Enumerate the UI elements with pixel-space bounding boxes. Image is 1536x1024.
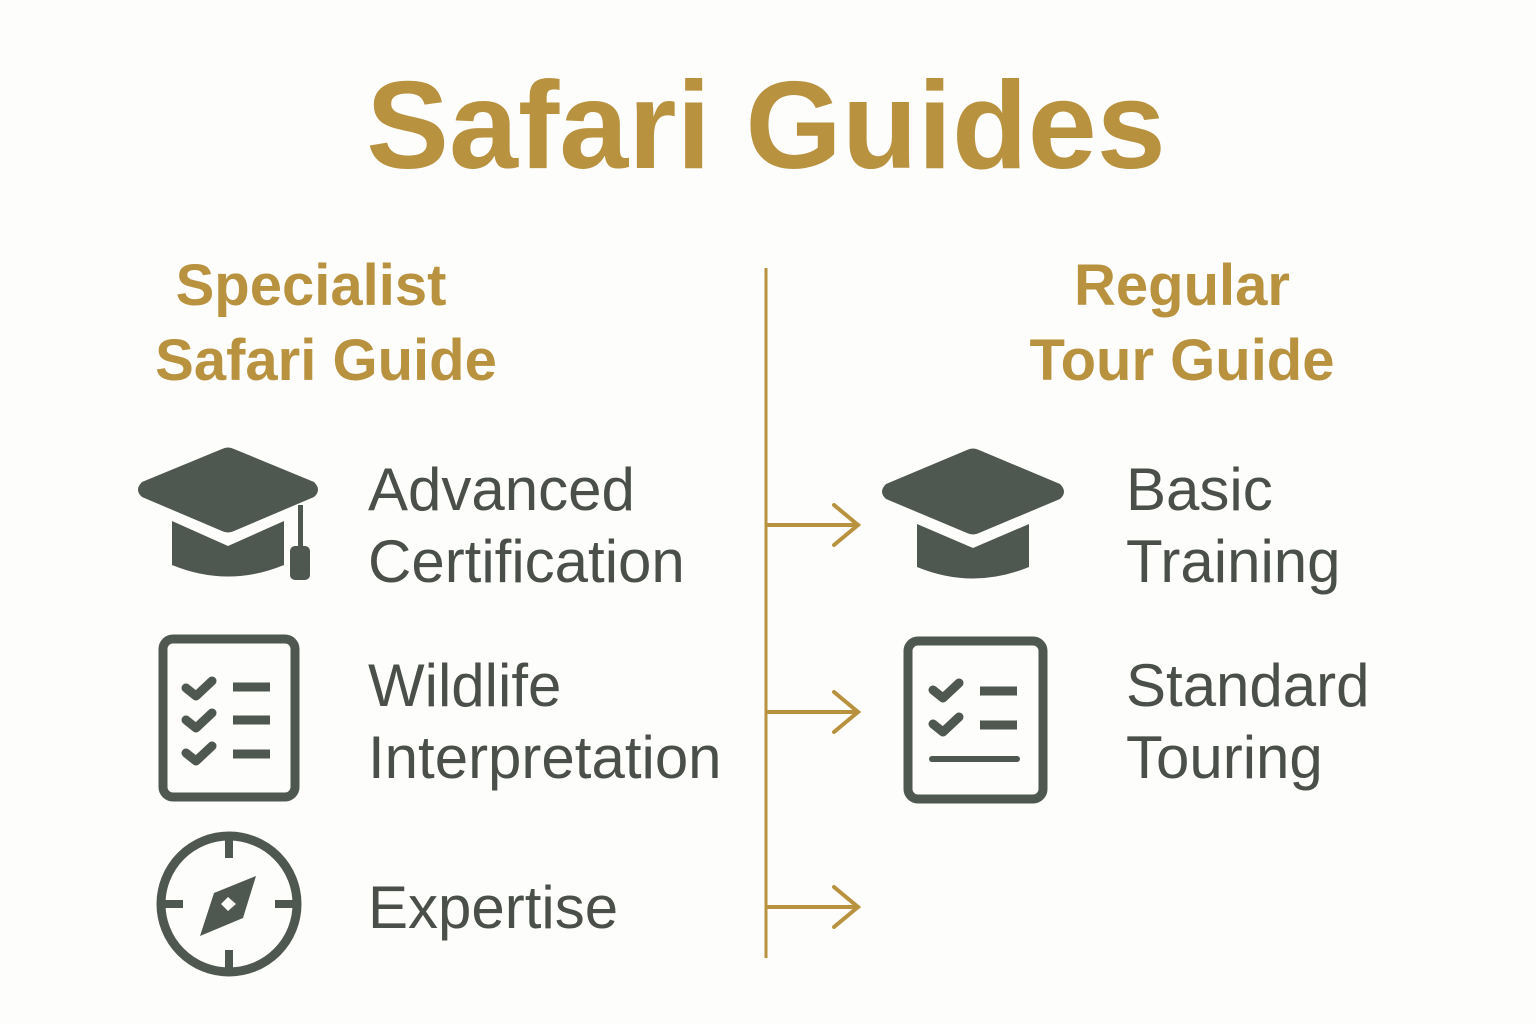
icon: checklist right <box>908 641 1043 799</box>
title: Safari Guides <box>366 57 1166 195</box>
heading: specialist: Specialist <box>176 253 446 318</box>
text: standard touring: Touring <box>1126 724 1323 791</box>
text: basic training: Training <box>1126 528 1341 595</box>
text: expertise: Expertise <box>368 874 618 941</box>
text: wildlife interpretation: Interpretation <box>368 724 722 791</box>
text: standard touring: Standard <box>1126 652 1370 719</box>
arrow 3 <box>768 887 858 927</box>
icon: grad cap right <box>882 448 1064 578</box>
heading: specialist: Safari Guide <box>155 328 497 393</box>
text: wildlife interpretation: Wildlife <box>368 652 561 719</box>
arrow 2 <box>768 692 858 732</box>
text: basic training: Basic <box>1126 456 1273 523</box>
divider line <box>764 268 768 958</box>
text: advanced certification: Certification <box>368 528 685 595</box>
icon: compass <box>161 836 297 972</box>
heading: regular: Tour Guide <box>1029 328 1335 393</box>
icon: checklist left <box>163 639 295 797</box>
text: advanced certification: Advanced <box>368 456 635 523</box>
arrow 1 <box>768 505 858 545</box>
heading: regular: Regular <box>1074 253 1290 318</box>
icon: grad cap left <box>138 448 318 580</box>
